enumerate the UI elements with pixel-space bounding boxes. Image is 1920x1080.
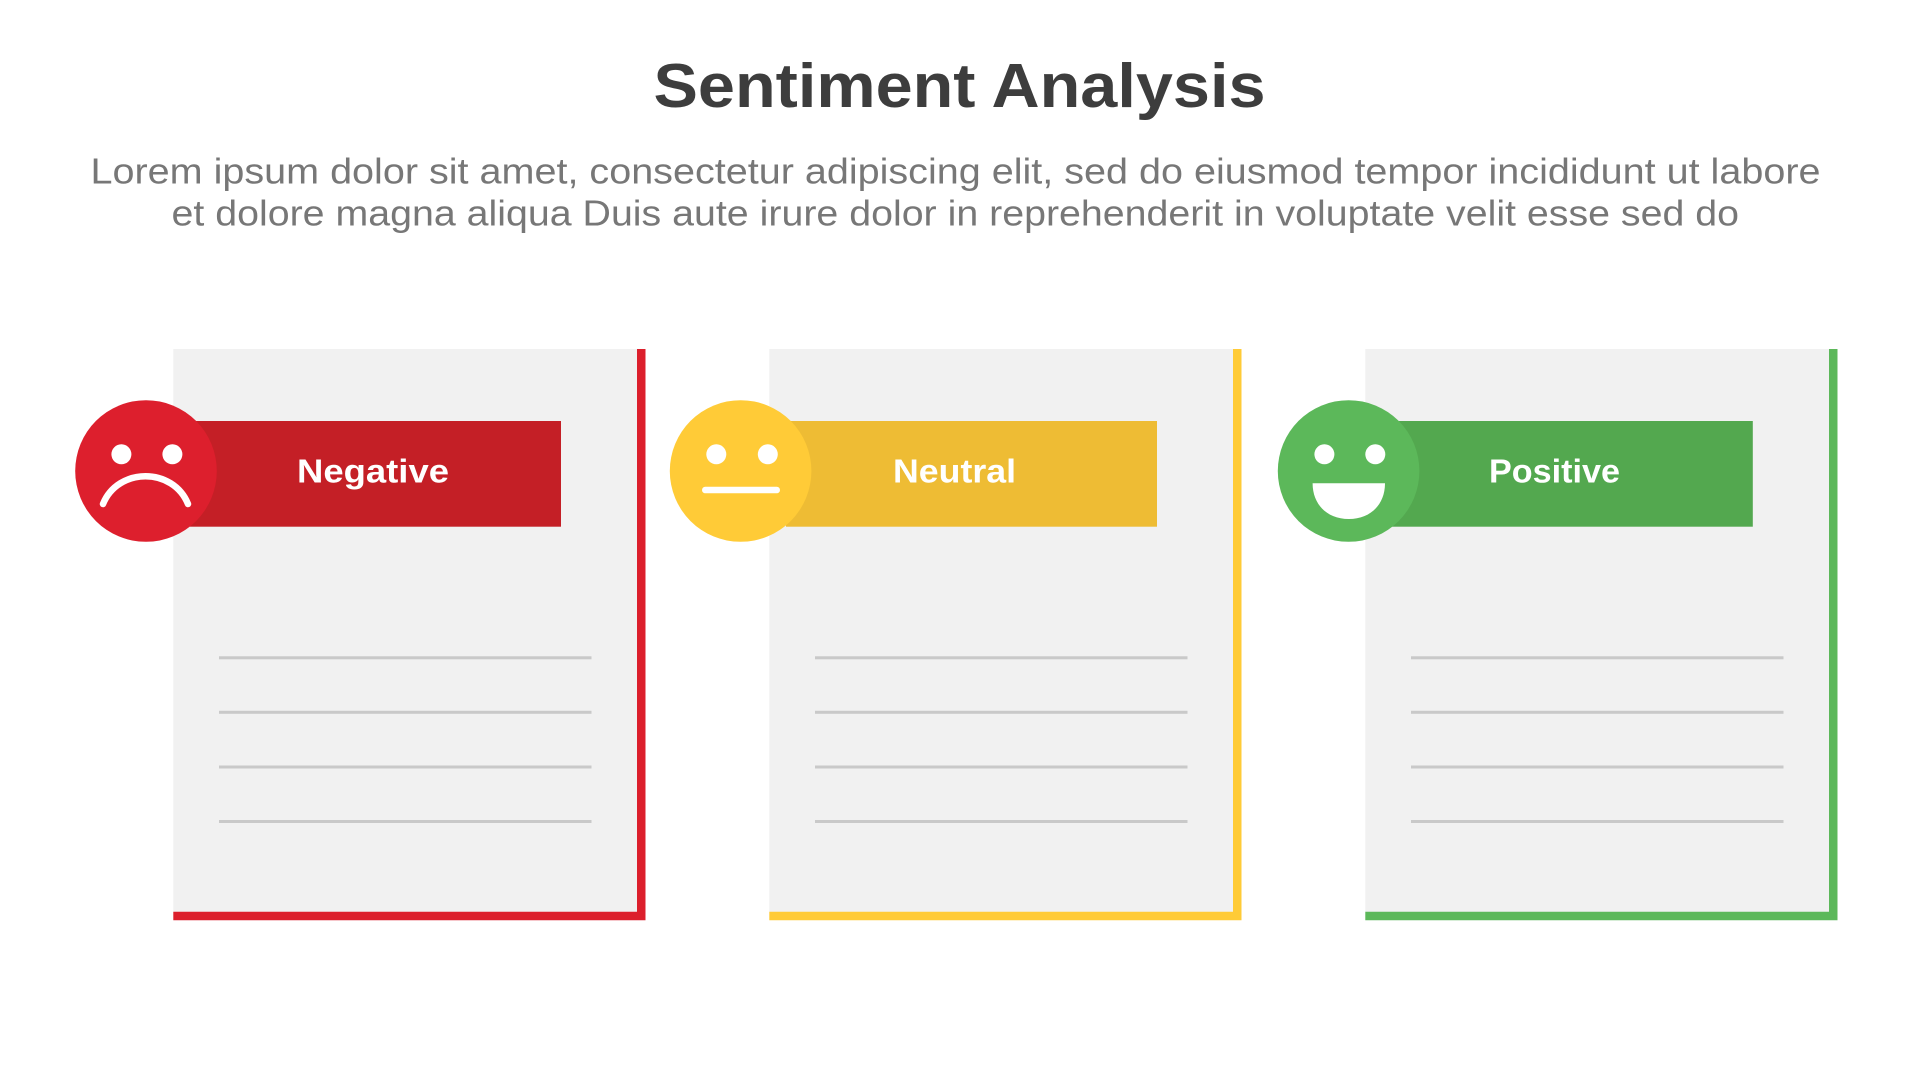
subtitle text block: Lorem ipsum dolor sit amet, consectetur adipiscing elit, sed do eiusmod tempor incididunt ut labore (90, 150, 1821, 192)
negative banner (190, 421, 561, 527)
positive banner (1382, 421, 1753, 527)
neutral label: Neutral (893, 453, 1016, 490)
subtitle text block: et dolore magna aliqua Duis aute irure dolor in reprehenderit in voluptate velit esse sed do (172, 192, 1739, 234)
panel: negative (75, 349, 645, 920)
negative card border (173, 349, 646, 920)
neutral card background (769, 349, 1233, 912)
neutral banner (786, 421, 1157, 527)
positive card background (1365, 349, 1829, 912)
positive card border (1365, 349, 1838, 920)
icon: neutral face (670, 400, 811, 542)
positive label: Positive (1489, 453, 1620, 490)
panel: positive (1278, 349, 1838, 920)
negative card background (173, 349, 637, 912)
icon: happy face (1278, 400, 1419, 542)
icon: sad face (75, 400, 217, 542)
subtitle text block (90, 150, 1821, 234)
panel: neutral (670, 349, 1242, 920)
positive text lines (1411, 656, 1784, 823)
neutral text lines (815, 656, 1188, 823)
neutral card border (769, 349, 1242, 920)
title: Sentiment Analysis (654, 52, 1266, 121)
negative text lines (219, 656, 592, 823)
negative label: Negative (297, 453, 449, 490)
